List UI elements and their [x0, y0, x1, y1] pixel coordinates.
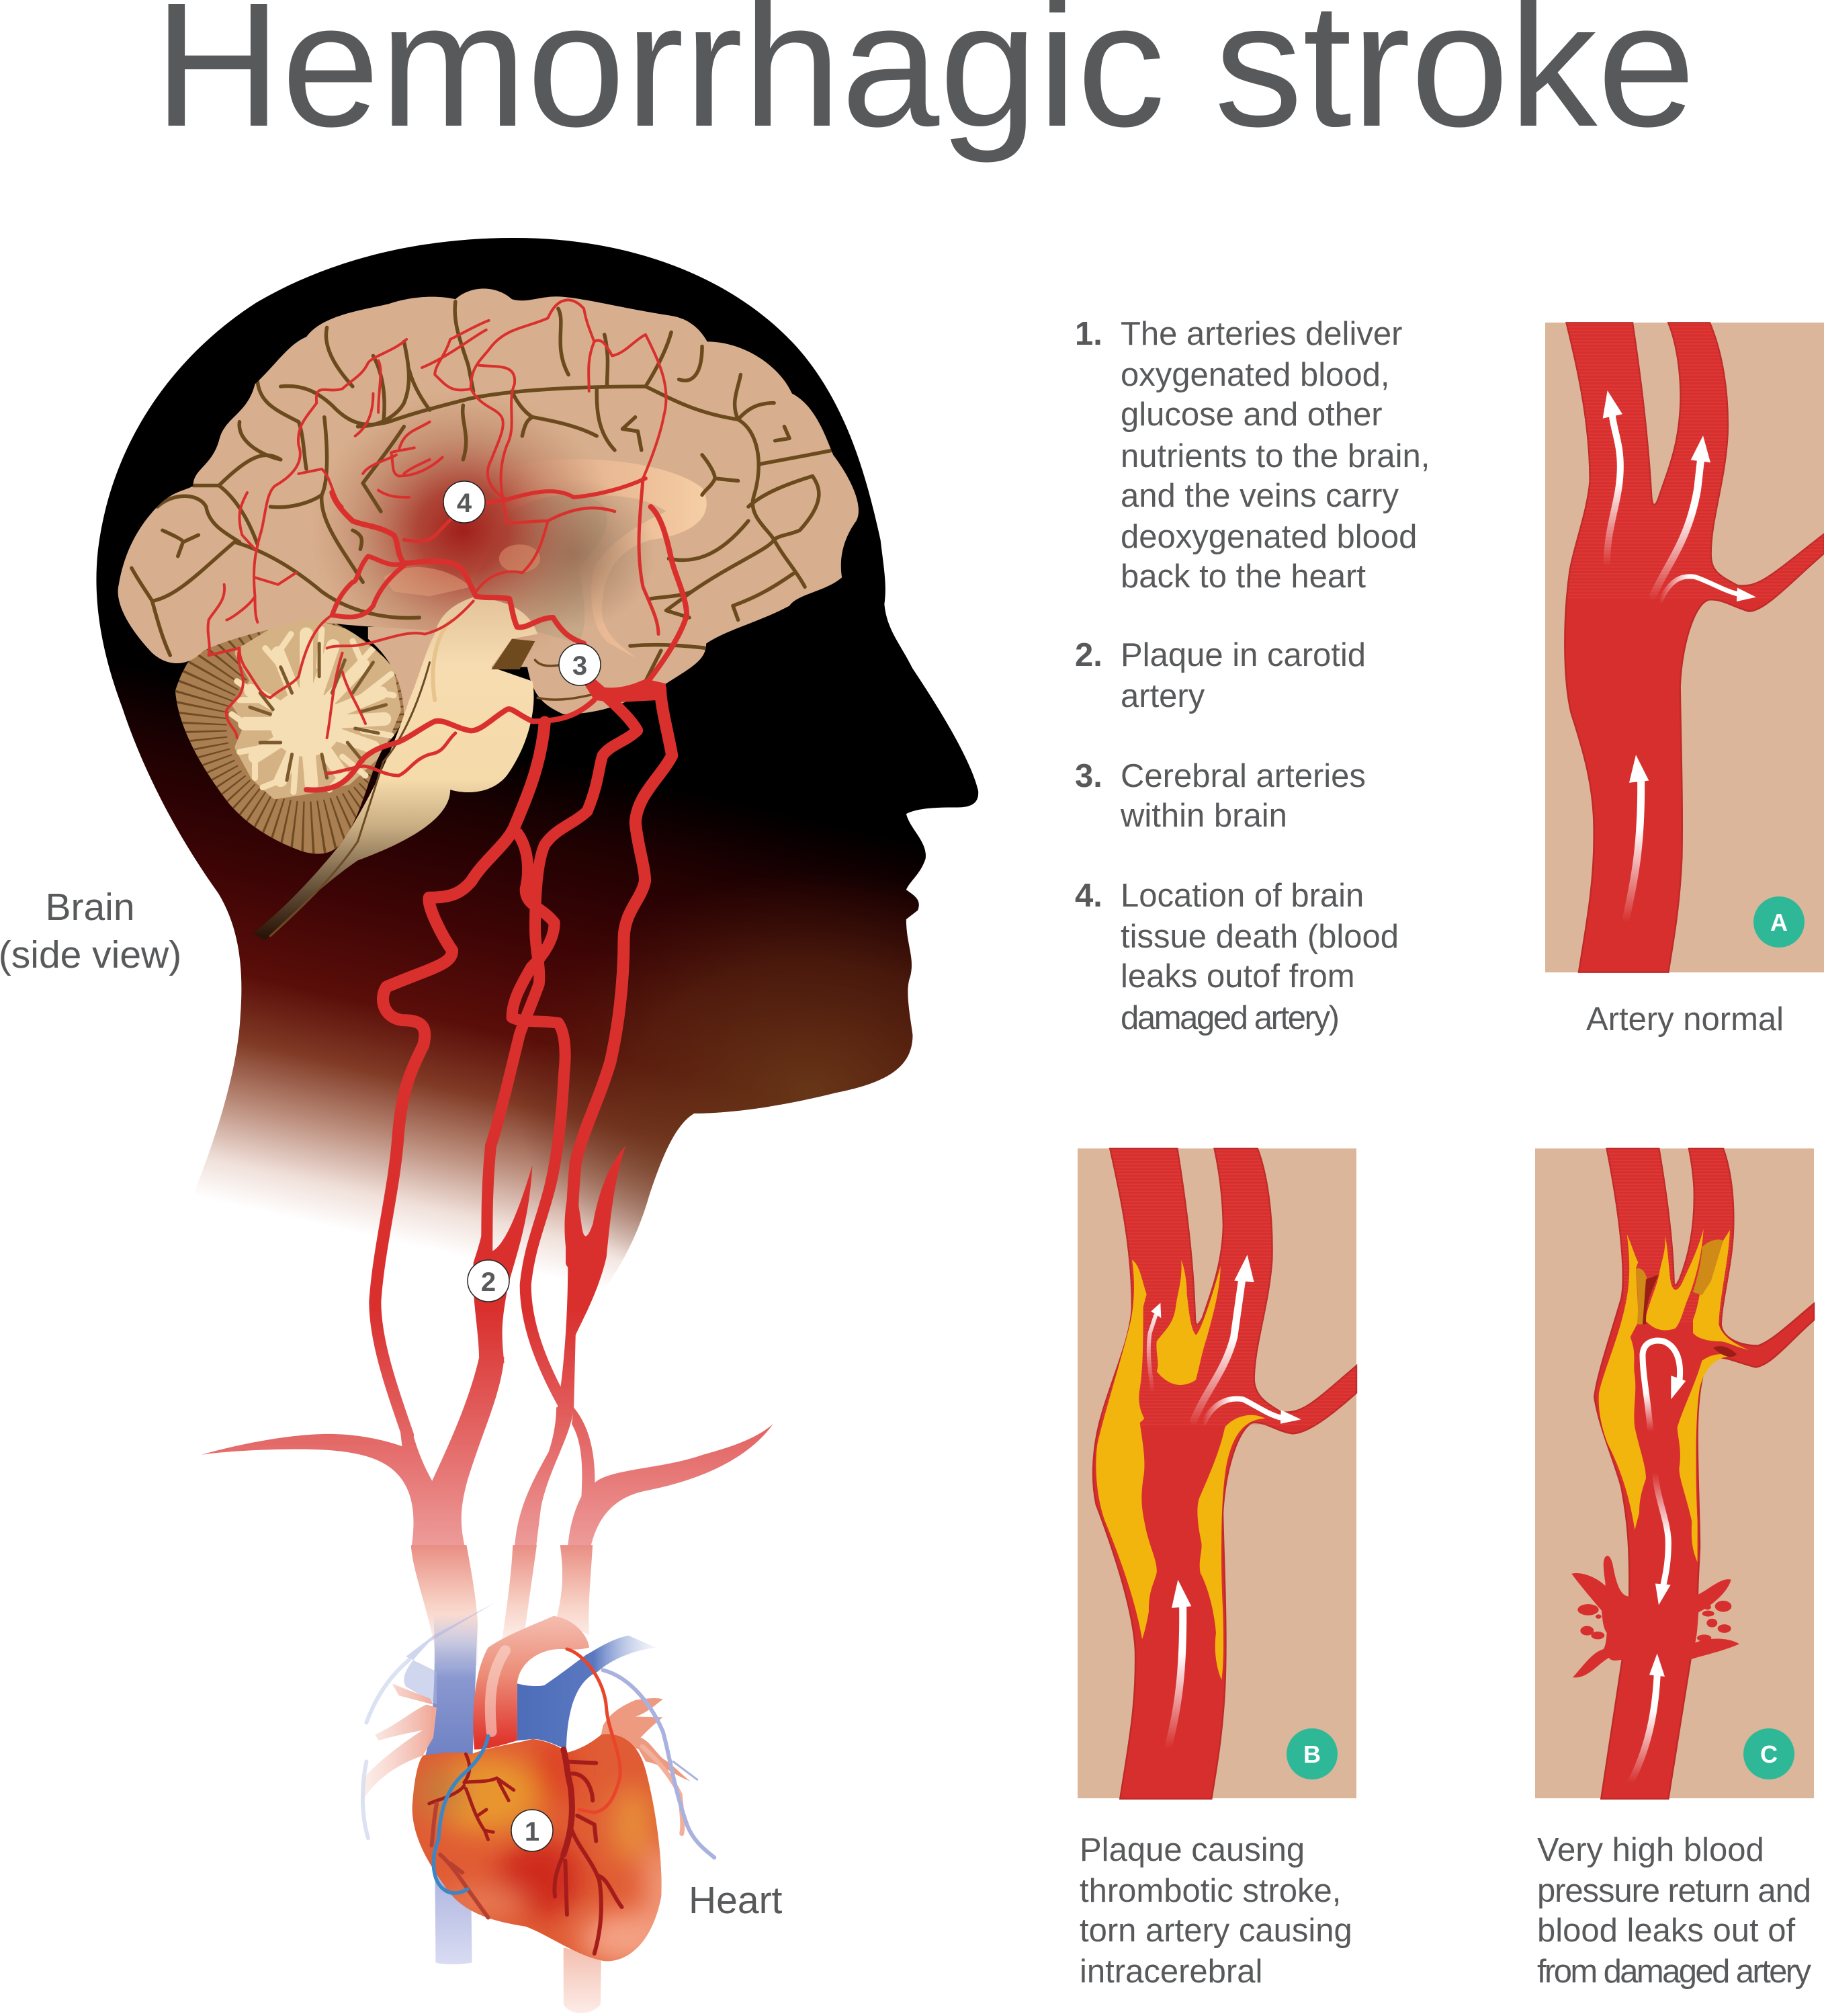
- list item 1: [1075, 316, 1430, 595]
- numbered list: [1075, 316, 1430, 1036]
- panel B: plaque: [1078, 1148, 1356, 1799]
- numbered markers: [443, 481, 601, 1851]
- list item 2: [1075, 637, 1366, 714]
- caption C: Very high blood: [1537, 1832, 1764, 1868]
- list item 1: 1.: [1075, 316, 1102, 352]
- coronary arteries: [429, 1649, 622, 1954]
- marker 3: [559, 644, 601, 685]
- list item 1: oxygenated blood,: [1121, 357, 1389, 393]
- badge A: [1753, 896, 1805, 948]
- list item 1: glucose and other: [1121, 396, 1383, 433]
- flow arrows B: [1149, 1255, 1301, 1749]
- caption B: intracerebral: [1080, 1954, 1262, 1990]
- caption C: [1537, 1832, 1811, 1990]
- list item 2: Plaque in carotid: [1121, 637, 1366, 673]
- list item 4: 4.: [1075, 878, 1102, 914]
- plaque deposits C: [1599, 1229, 1749, 1562]
- arbor vitae branches: [232, 630, 394, 792]
- brain illustration: [118, 288, 859, 941]
- caption B: torn artery causing: [1080, 1913, 1352, 1949]
- flow arrows A: [1603, 390, 1756, 920]
- marker 1: 1: [525, 1817, 539, 1847]
- caption B: thrombotic stroke,: [1080, 1873, 1341, 1909]
- artery A: [1565, 323, 1824, 972]
- list item 4: [1075, 878, 1399, 1036]
- brainstem: [253, 596, 537, 941]
- caption C: blood leaks out of: [1537, 1913, 1795, 1949]
- heart body: [412, 1734, 662, 1961]
- label: brain side view: [0, 886, 181, 976]
- badge B: B: [1303, 1740, 1321, 1768]
- badge C: C: [1760, 1740, 1778, 1768]
- list item 4: leaks outof from: [1121, 958, 1355, 995]
- list item 3: Cerebral arteries: [1121, 758, 1366, 794]
- marker 3: 3: [572, 651, 587, 681]
- cerebrum: [118, 288, 859, 714]
- neck arteries: [202, 683, 773, 1546]
- list item 2: 2.: [1075, 637, 1102, 673]
- marker 2: [468, 1260, 509, 1302]
- marker 4: 4: [457, 489, 472, 518]
- list item 3: 3.: [1075, 758, 1102, 794]
- artery B: [1093, 1148, 1356, 1799]
- list item 1: and the veins carry: [1121, 478, 1399, 514]
- caption C: pressure return and: [1537, 1873, 1811, 1909]
- list item 3: within brain: [1120, 798, 1287, 834]
- list item 2: artery: [1121, 678, 1205, 714]
- caption B: Plaque causing: [1080, 1832, 1305, 1868]
- list item 3: [1075, 758, 1366, 834]
- list item 1: The arteries deliver: [1121, 316, 1402, 352]
- plaque deposits B: [1096, 1260, 1265, 1680]
- list item 1: nutrients to the brain,: [1121, 438, 1430, 474]
- badge C: [1743, 1728, 1794, 1779]
- inner brain structures: [327, 406, 707, 657]
- list item 1: deoxygenated blood: [1121, 519, 1417, 555]
- panel A: artery normal: [1545, 323, 1824, 972]
- great vessels: [361, 1545, 714, 2013]
- caption A: Artery normal: [1586, 1001, 1784, 1038]
- marker 4: [443, 481, 485, 523]
- artery C with rupture: [1571, 1148, 1814, 1799]
- sulci: [132, 302, 833, 681]
- label: brain side view: (side view): [0, 933, 181, 976]
- caption B: [1080, 1832, 1352, 1990]
- list item 4: damaged artery): [1121, 1000, 1340, 1036]
- cerebral arteries: [208, 300, 687, 790]
- heart illustration: [361, 1545, 714, 2013]
- badge B: [1287, 1728, 1338, 1779]
- list item 4: Location of brain: [1121, 878, 1364, 914]
- panel C: rupture: [1535, 1148, 1814, 1799]
- flow arrows C: [1631, 1341, 1686, 1783]
- label: heart: Heart: [689, 1879, 783, 1922]
- list item 4: tissue death (blood: [1121, 919, 1399, 955]
- cerebellum: [175, 610, 417, 854]
- marker 2: 2: [481, 1267, 496, 1297]
- badge A: A: [1770, 909, 1788, 936]
- caption C: from damaged artery: [1537, 1954, 1811, 1990]
- arterial base ring: [584, 679, 666, 702]
- label: brain side view: Brain: [45, 886, 135, 929]
- marker 1: [511, 1810, 553, 1851]
- head silhouette: [96, 238, 1029, 1298]
- list item 1: back to the heart: [1121, 558, 1366, 595]
